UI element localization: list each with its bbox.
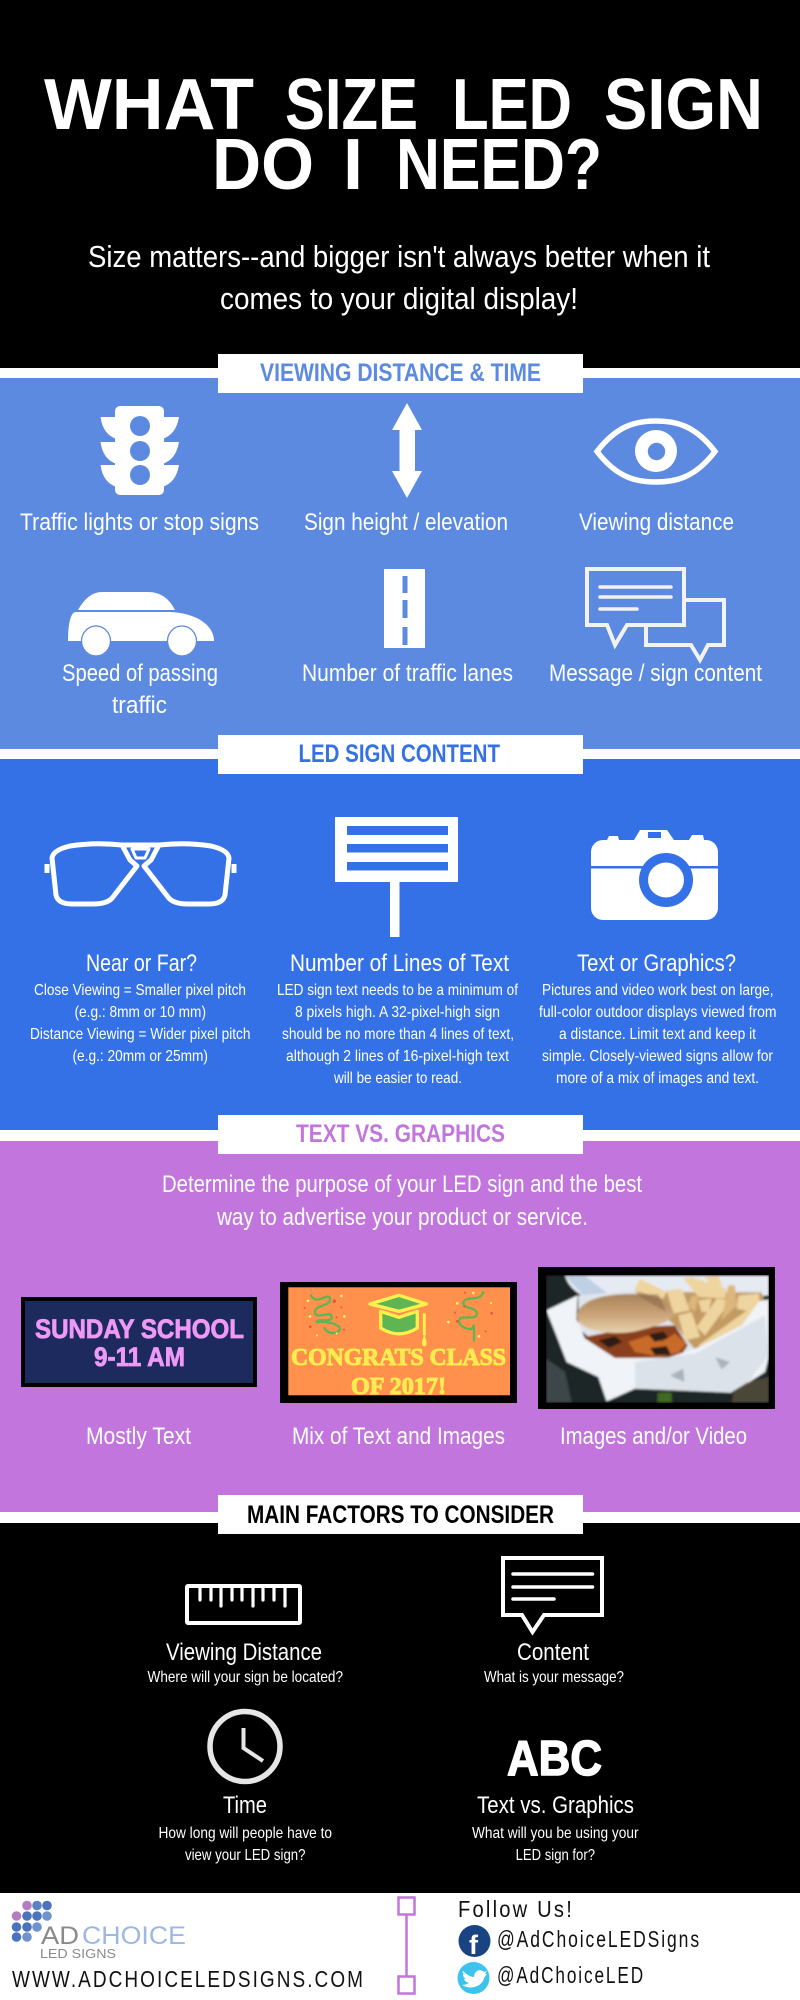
panel: title header	[0, 0, 800, 369]
text: text vs graphics: Text vs. Graphics	[477, 1792, 634, 1819]
icon: clock	[210, 1712, 280, 1782]
facebook handle	[458, 1925, 701, 1960]
logo: AdChoice LED Signs	[12, 1901, 186, 1961]
heading: LED sign content: LED SIGN CONTENT	[298, 740, 500, 768]
panel: main factors	[0, 1495, 800, 1893]
panel: viewing distance and time	[0, 354, 800, 750]
label: traffic lanes: Number of traffic lanes	[302, 660, 513, 687]
logo: AdChoice LED Signs: CHOICE	[82, 1922, 186, 1950]
title: SIZE	[285, 65, 418, 145]
icon: chat bubbles	[587, 569, 724, 660]
intro text: way to advertise your product or service.	[216, 1204, 588, 1231]
label: mix of text and images: Mix of Text and Images	[292, 1423, 505, 1450]
text: content: Content	[517, 1639, 589, 1666]
text: content	[484, 1639, 624, 1686]
title: SIGN	[604, 65, 763, 145]
label: message content: Message / sign content	[549, 660, 762, 687]
heading: viewing distance and time: VIEWING DISTANCE & TIME	[260, 359, 541, 387]
sign example: mix of text and images: OF 2017!	[351, 1374, 446, 1400]
icon: camera	[591, 830, 718, 920]
logo: AdChoice LED Signs: AD	[41, 1922, 79, 1950]
facebook handle: f	[469, 1930, 479, 1960]
intro text: Determine the purpose of your LED sign and the best	[162, 1171, 642, 1198]
title: WHAT	[44, 65, 254, 145]
sign example: mix of text and images: CONGRATS CLASS	[291, 1345, 506, 1371]
text: text or graphics: more of a mix of images and text.	[556, 1070, 759, 1087]
facebook handle: @AdChoiceLEDSigns	[497, 1926, 701, 1952]
title: NEED?	[396, 125, 602, 205]
label: images and video: Images and/or Video	[560, 1423, 747, 1450]
text: near or far: (e.g.: 8mm or 10 mm)	[74, 1004, 206, 1021]
label: speed of passing traffic	[62, 660, 218, 719]
label: viewing distance: Viewing distance	[579, 509, 734, 536]
text: viewing distance	[148, 1639, 343, 1686]
text: text vs graphics	[472, 1792, 639, 1864]
subtitle: comes to your digital display!	[220, 281, 578, 316]
logo: AdChoice LED Signs: LED SIGNS	[40, 1946, 116, 1961]
icon: speech bubble	[503, 1558, 602, 1632]
twitter handle: @AdChoiceLED	[497, 1962, 645, 1988]
graphic: graduation cap and confetti	[304, 1292, 493, 1346]
subtitle: Size matters--and bigger isn't always better when it	[88, 239, 710, 274]
text: number of lines of text	[277, 950, 518, 1087]
title: DO	[212, 125, 314, 205]
text: time: How long will people have to	[158, 1825, 332, 1842]
text: content: What is your message?	[484, 1669, 624, 1686]
panel: LED sign content	[0, 735, 800, 1131]
icon: eye	[597, 421, 715, 482]
text: number of lines of text: will be easier to read.	[333, 1070, 462, 1087]
title	[44, 65, 763, 205]
heading: main factors to consider: MAIN FACTORS TO CONSIDER	[247, 1501, 554, 1529]
text: number of lines of text: should be no more than 4 lines of text,	[282, 1026, 514, 1043]
label: speed of passing traffic: traffic	[112, 692, 167, 719]
text: number of lines of text: 8 pixels high. A 32-pixel-high sign	[295, 1004, 500, 1021]
icon: ABC letters: ABC	[507, 1732, 602, 1786]
icon: road	[384, 569, 425, 648]
icon: ruler	[187, 1586, 300, 1623]
subtitle	[88, 239, 710, 316]
title: I	[343, 125, 363, 205]
text: text vs graphics: LED sign for?	[516, 1847, 595, 1864]
heading: text vs graphics: TEXT VS. GRAPHICS	[296, 1120, 505, 1148]
text: text or graphics: a distance. Limit text and keep it	[559, 1026, 756, 1043]
text: near or far	[30, 950, 251, 1065]
follow us heading: Follow Us!	[458, 1896, 574, 1922]
label: sign height: Sign height / elevation	[304, 509, 508, 536]
label: speed of passing traffic: Speed of passing	[62, 660, 218, 687]
heading: LED sign content	[218, 735, 583, 774]
text: time: Time	[223, 1792, 267, 1819]
text: near or far: Distance Viewing = Wider pixel pitch	[30, 1026, 251, 1043]
intro text	[162, 1171, 642, 1231]
icon: car	[68, 592, 214, 656]
sign example: mostly text	[21, 1297, 257, 1387]
text: near or far: Close Viewing = Smaller pixel pitch	[34, 982, 246, 999]
text: text vs graphics: What will you be using your	[472, 1825, 639, 1842]
text: number of lines of text: Number of Lines of Text	[290, 950, 509, 977]
sign example: photo of sandwich and fries	[538, 1267, 775, 1409]
twitter handle	[458, 1962, 645, 1994]
text: viewing distance: Where will your sign be located?	[148, 1669, 343, 1686]
icon: traffic light	[100, 406, 179, 495]
sign example: mostly text: SUNDAY SCHOOL	[35, 1314, 244, 1344]
panel: footer	[0, 1893, 800, 2000]
text: near or far: Near or Far?	[86, 950, 197, 977]
text: time	[158, 1792, 332, 1864]
text: time: view your LED sign?	[185, 1847, 306, 1864]
sign example: mix of text and images	[280, 1282, 517, 1403]
text: text or graphics	[539, 950, 776, 1087]
label: traffic lights: Traffic lights or stop signs	[20, 509, 259, 536]
title: LED	[452, 65, 572, 145]
icon: glasses	[47, 844, 234, 904]
website url: WWW.ADCHOICELEDSIGNS.COM	[12, 1966, 365, 1992]
icon: up-down arrow	[392, 403, 422, 498]
icon: sign on post	[335, 817, 458, 937]
text: number of lines of text: LED sign text needs to be a minimum of	[277, 982, 518, 999]
sign example: mostly text: 9-11 AM	[94, 1342, 185, 1372]
heading: main factors to consider	[218, 1495, 583, 1534]
text: near or far: (e.g.: 20mm or 25mm)	[72, 1048, 208, 1065]
heading: viewing distance and time	[218, 354, 583, 393]
text: viewing distance: Viewing Distance	[166, 1639, 322, 1666]
heading: text vs graphics	[218, 1115, 583, 1154]
label: mostly text: Mostly Text	[86, 1423, 191, 1450]
panel: text vs graphics	[0, 1115, 800, 1513]
connector divider	[398, 1898, 414, 1994]
text: text or graphics: Text or Graphics?	[577, 950, 736, 977]
text: number of lines of text: although 2 lines of 16-pixel-high text	[286, 1048, 509, 1065]
